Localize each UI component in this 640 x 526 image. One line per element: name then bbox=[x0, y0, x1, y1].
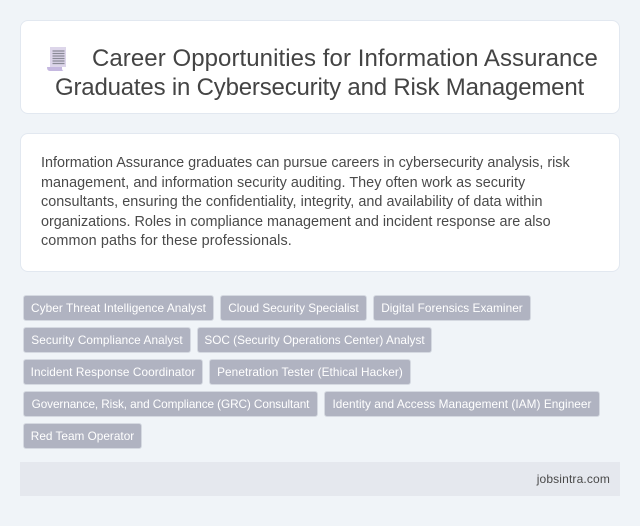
title line 1: Career Opportunities for Information Assurance bbox=[92, 45, 598, 72]
description text: Information Assurance graduates can pursue careers in cybersecurity analysis, risk bbox=[41, 155, 570, 171]
tag: Security Compliance Analyst bbox=[31, 333, 183, 347]
tag: Cloud Security Specialist bbox=[228, 301, 359, 315]
tag bbox=[209, 359, 411, 385]
tag bbox=[197, 327, 432, 353]
tag: Penetration Tester (Ethical Hacker) bbox=[217, 365, 403, 379]
tag: Digital Forensics Examiner bbox=[381, 301, 523, 315]
tag bbox=[23, 359, 203, 385]
tag: Identity and Access Management (IAM) Engineer bbox=[332, 397, 592, 411]
tag: Cyber Threat Intelligence Analyst bbox=[31, 301, 206, 315]
tag bbox=[220, 295, 367, 321]
description text: organizations. Roles in compliance management and incident response are also bbox=[41, 214, 551, 230]
tag: SOC (Security Operations Center) Analyst bbox=[204, 333, 425, 347]
panel: title card bbox=[20, 20, 620, 114]
tag bbox=[373, 295, 531, 321]
tag bbox=[324, 391, 600, 417]
tag bbox=[23, 327, 191, 353]
footer source text: jobsintra.com bbox=[537, 472, 610, 486]
tag bbox=[23, 391, 318, 417]
tag: Governance, Risk, and Compliance (GRC) Consultant bbox=[32, 397, 309, 411]
description text: common paths for these professionals. bbox=[41, 233, 292, 249]
tag bbox=[23, 295, 214, 321]
panel: description card bbox=[20, 133, 620, 272]
tag: Incident Response Coordinator bbox=[31, 365, 195, 379]
tag: Red Team Operator bbox=[31, 429, 134, 443]
footer bar bbox=[20, 462, 620, 496]
title line 2: Graduates in Cybersecurity and Risk Management bbox=[55, 74, 584, 101]
description text bbox=[41, 155, 570, 249]
panel: career tags bbox=[23, 295, 600, 449]
icon: document scroll bbox=[47, 47, 66, 71]
description text: consultants, ensuring the confidentiality, integrity, and availability of data within bbox=[41, 194, 543, 210]
tag bbox=[23, 423, 142, 449]
description text: management, and information security auditing. They often work as security bbox=[41, 174, 525, 190]
